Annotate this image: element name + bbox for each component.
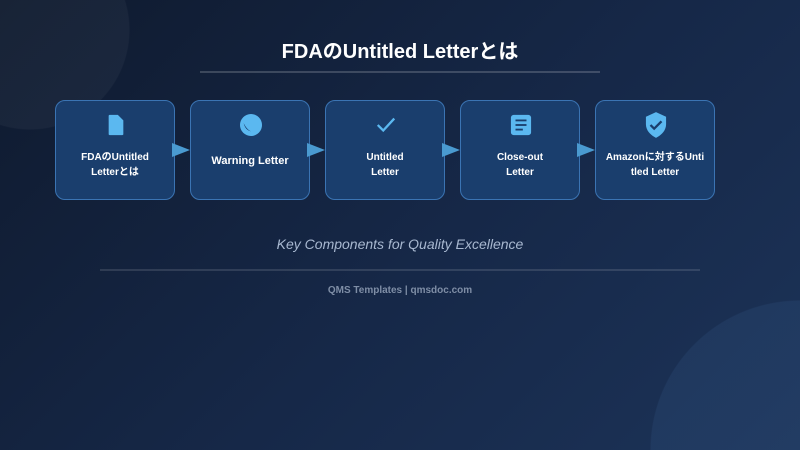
panel: step 1 [55,100,175,200]
arrow 4 [577,143,595,157]
icon: document [108,114,124,136]
arrow 2 [307,143,325,157]
panel: step 2 [190,100,310,200]
subtitle: Key Components for Quality Excellence [277,236,523,252]
panel: step 5 [595,100,715,200]
panel: step 3: Letter [371,167,399,178]
arrow 3 [442,143,460,157]
icon: check [377,118,395,132]
arrow 1 [172,143,190,157]
panel: step 5: Amazonに対するUnti [606,152,704,163]
panel: step 3 [325,100,445,200]
icon: leaf circle [240,114,262,136]
panel: step 3: Untitled [366,152,404,163]
footer: QMS Templates | qmsdoc.com [328,285,472,296]
panel: step 2: Warning Letter [211,155,289,167]
panel: step 4 [460,100,580,200]
panel: step 1: Letterとは [91,167,139,178]
title: FDAのUntitled Letterとは [282,41,518,63]
panel: step 5: tled Letter [631,167,679,178]
icon: shield [646,112,666,138]
panel: step 4: Letter [506,167,534,178]
panel: step 4: Close-out [497,152,543,163]
icon: note [510,114,532,136]
panel: step 1: FDAのUntitled [81,152,149,163]
